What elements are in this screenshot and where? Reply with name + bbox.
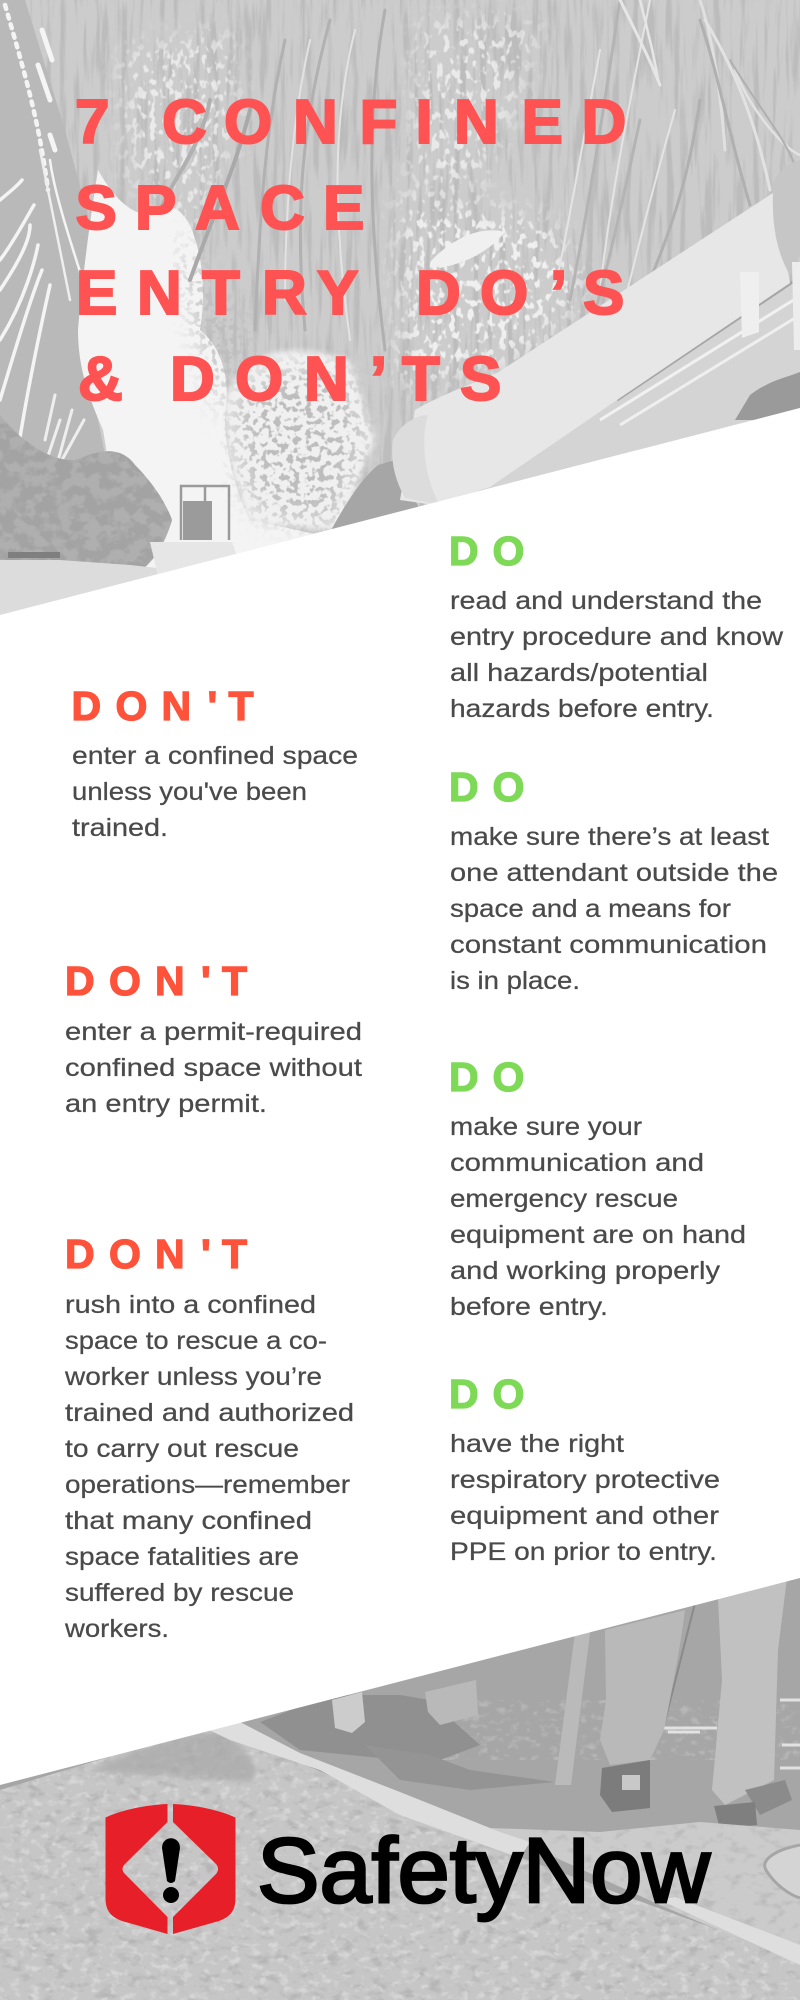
don't item 1: unless you've been	[72, 778, 307, 806]
truck rails	[480, 276, 800, 490]
do item 1: DO	[449, 528, 524, 574]
icon: red shield with diamond	[106, 1804, 236, 1934]
plant and railing	[0, 416, 172, 566]
dark palm frond, left	[0, 0, 104, 460]
do item 1: all hazards/potential	[450, 659, 708, 687]
title	[75, 88, 626, 414]
don't item 2: enter a permit-required	[65, 1018, 362, 1046]
do item 3: DO	[449, 1054, 524, 1100]
pipe flange near	[392, 415, 440, 505]
don't item 2: DON'T	[65, 958, 247, 1004]
don't item 3: that many confined	[65, 1507, 312, 1535]
do item 3: equipment are on hand	[450, 1221, 746, 1249]
panel: do's column	[449, 528, 784, 1566]
don't item 3: space to rescue a co-	[65, 1327, 327, 1355]
do item 4: DO	[449, 1371, 524, 1417]
do item 2: constant communication	[450, 931, 767, 959]
curb	[205, 1722, 530, 1858]
background photo: workers' legs, curb and grass	[0, 1570, 800, 2000]
light ground at right	[490, 1822, 800, 1965]
do item 3: emergency rescue	[450, 1185, 678, 1213]
do item 1: hazards before entry.	[450, 695, 714, 723]
leg 1	[600, 1610, 685, 1765]
don't item 1: trained.	[72, 814, 168, 842]
do item 2: make sure there’s at least	[450, 823, 769, 851]
do item 4: respiratory protective	[450, 1466, 720, 1494]
leg 2	[712, 1578, 787, 1805]
thin pole	[664, 1603, 695, 1725]
do item 4: PPE on prior to entry.	[450, 1538, 717, 1566]
title: ENTRY DO’S	[76, 259, 624, 328]
white content band	[0, 408, 800, 1785]
do item 4: equipment and other	[450, 1502, 719, 1530]
don't item 3: rush into a confined	[65, 1291, 316, 1319]
wordmark: SafetyNow	[257, 1820, 711, 1922]
don't item 3: worker unless you’re	[64, 1363, 322, 1391]
logo: SafetyNow	[106, 1804, 711, 1934]
background photo: palm trees and pipe	[0, 0, 800, 620]
rachis of left palm, with light notches	[5, 5, 48, 190]
do item 1: entry procedure and know	[450, 623, 784, 651]
do item 2: DO	[449, 764, 524, 810]
pole	[555, 1625, 591, 1785]
bright gaps between fronds	[120, 20, 540, 240]
do item 2: one attendant outside the	[450, 859, 778, 887]
central fronds	[190, 110, 250, 280]
don't item 3: DON'T	[65, 1231, 247, 1277]
don't item 1: enter a confined space	[72, 742, 358, 770]
do item 2: space and a means for	[450, 895, 731, 923]
don't item 1: DON'T	[72, 683, 254, 729]
do item 3	[449, 1054, 746, 1321]
do item 3: before entry.	[450, 1293, 608, 1321]
foliage mottled	[224, 350, 375, 530]
do item 3: communication and	[450, 1149, 704, 1177]
dark shadow under pipe	[330, 460, 420, 532]
don't item 3: operations—remember	[65, 1471, 350, 1499]
grass	[0, 1725, 800, 2000]
don't item 1	[72, 683, 358, 842]
do item 3: and working properly	[450, 1257, 721, 1285]
do item 1: read and understand the	[450, 587, 762, 615]
don't item 2: an entry permit.	[65, 1090, 267, 1118]
don't item 2	[65, 958, 362, 1118]
don't item 3: workers.	[64, 1615, 169, 1643]
don't item 3: suffered by rescue	[65, 1579, 294, 1607]
panel: don'ts column	[64, 683, 362, 1643]
title: 7 CONFINED	[75, 88, 626, 157]
don't item 2: confined space without	[65, 1054, 362, 1082]
sky	[78, 170, 320, 580]
do item 2	[449, 764, 778, 995]
left shoes	[260, 1695, 480, 1760]
manhole	[765, 1845, 800, 1898]
pants highlights ground	[400, 1700, 800, 1760]
don't item 3: to carry out rescue	[65, 1435, 299, 1463]
pipe	[400, 193, 790, 505]
do item 2: is in place.	[450, 967, 580, 995]
do item 3: make sure your	[450, 1113, 642, 1141]
title: & DON’TS	[78, 345, 501, 414]
don't item 3: trained and authorized	[65, 1399, 354, 1427]
upper right fronds	[620, 0, 660, 85]
don't item 3: space fatalities are	[65, 1543, 299, 1571]
do item 4: have the right	[450, 1430, 624, 1458]
don't item 3	[64, 1231, 354, 1643]
do item 1	[449, 528, 784, 723]
do item 4	[449, 1371, 720, 1566]
title: SPACE	[76, 174, 364, 243]
pipe flange far	[772, 162, 796, 271]
